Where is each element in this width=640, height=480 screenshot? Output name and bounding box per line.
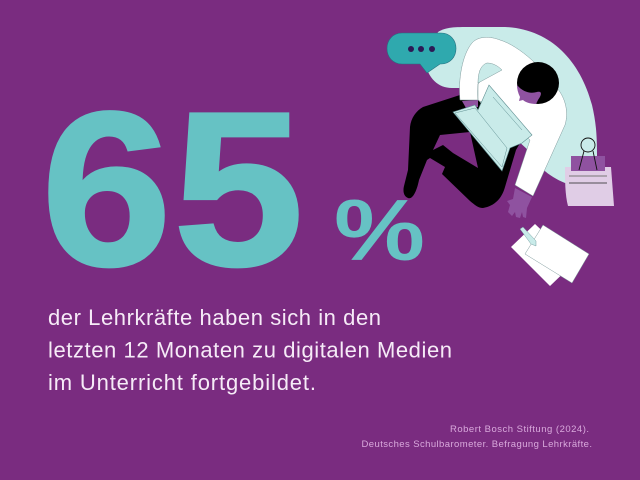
white shirt and arm — [460, 37, 567, 196]
line 1: der Lehrkräfte haben sich in den — [48, 305, 381, 330]
purple wrist — [462, 100, 478, 108]
source note — [362, 424, 592, 450]
digit 6: 6 — [41, 67, 172, 312]
percent sign: % — [334, 183, 425, 279]
black trousers and shoes — [403, 95, 520, 208]
head — [517, 62, 559, 104]
main statement text — [48, 305, 452, 395]
digit 5: 5 — [173, 67, 304, 312]
source line 2: Deutsches Schulbarometer. Befragung Lehrkräfte. — [362, 439, 592, 450]
big number 65 — [41, 67, 304, 312]
hand — [507, 188, 532, 218]
illustration: teacher reading on the floor — [387, 27, 614, 286]
binder clip note — [565, 138, 614, 206]
source line 1: Robert Bosch Stiftung (2024). — [450, 424, 589, 435]
line 3: im Unterricht fortgebildet. — [48, 370, 316, 395]
line 2: letzten 12 Monaten zu digitalen Medien — [48, 338, 452, 362]
sleeve shadow shape — [478, 63, 502, 83]
speech bubble — [387, 33, 456, 73]
pale background blob — [425, 27, 597, 183]
papers and pencil — [511, 224, 589, 286]
open book — [453, 85, 532, 171]
